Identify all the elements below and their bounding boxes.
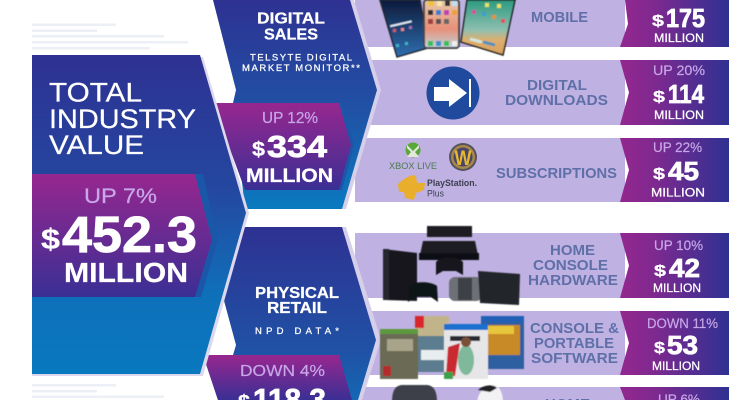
total heading: VALUE (49, 130, 144, 160)
total value tag: MILLION (64, 257, 188, 288)
source note lines, top (32, 24, 188, 50)
mobile label: MOBILE (531, 9, 588, 26)
icon: playstation plus: Plus (427, 188, 444, 198)
tag: console and portable software value: MILLION (652, 359, 700, 373)
console and portable software label (530, 320, 619, 367)
tag: digital downloads value: UP 20% (653, 63, 705, 78)
tag: digital downloads value: $ (653, 89, 665, 106)
home console hardware label (528, 242, 618, 289)
digital downloads label (505, 77, 608, 109)
subscriptions logos (389, 142, 477, 200)
icon: xbox live: XBOX LIVE (389, 161, 437, 172)
total heading (49, 78, 196, 160)
digital sales heading: SALES (264, 26, 318, 44)
tag: digital downloads value (620, 60, 729, 125)
tag: console and portable software value: 53 (667, 332, 698, 360)
total heading: INDUSTRY (49, 104, 196, 134)
home console hardware label: HOME (550, 242, 595, 259)
row: home accessories background (355, 387, 625, 400)
home console hardware label: HARDWARE (528, 272, 618, 289)
digital sales value tag: $ (252, 139, 265, 161)
icon: digital download arrow (426, 66, 480, 120)
total heading: TOTAL (49, 78, 142, 108)
icon: world of warcraft: W (454, 147, 472, 170)
digital sales value tag (213, 103, 351, 190)
total value tag: 452.3 (62, 206, 197, 263)
physical retail heading (255, 285, 339, 317)
digital sales value tag: UP 12% (262, 110, 318, 127)
panel: total industry value (32, 55, 249, 376)
tag: home console hardware value (620, 233, 729, 298)
digital downloads label: DOWNLOADS (505, 92, 608, 109)
tag: console and portable software value: $ (654, 340, 665, 357)
row: console and portable software background (355, 311, 625, 375)
accessories image (392, 385, 503, 400)
tag: mobile value: $ (652, 13, 664, 30)
tag: mobile value: MILLION (654, 31, 704, 45)
digital sales source: TELSYTE DIGITAL (250, 52, 352, 64)
tag: home accessories value (620, 387, 729, 400)
icon: playstation plus: PlayStation. (427, 178, 477, 188)
tag: subscriptions value: $ (653, 166, 665, 183)
home console hardware label: CONSOLE (533, 257, 608, 274)
physical retail value tag (203, 355, 352, 400)
tag: subscriptions value: MILLION (651, 186, 705, 200)
tag: home console hardware value: MILLION (653, 281, 701, 295)
icon: playstation plus (398, 175, 477, 200)
digital downloads label: DIGITAL (527, 77, 587, 94)
console and portable software label: PORTABLE (534, 335, 614, 352)
tag: console and portable software value: DOWN 11% (647, 316, 718, 331)
tag: digital downloads value: MILLION (654, 108, 704, 122)
digital sales value tag: 334 (267, 129, 328, 164)
digital sales source (242, 52, 360, 74)
digital sales heading (257, 10, 325, 44)
tag: mobile value (620, 0, 729, 47)
subscriptions label: SUBSCRIPTIONS (496, 165, 617, 182)
tag: home console hardware value: 42 (669, 255, 700, 283)
physical retail source: NPD DATA* (255, 326, 339, 337)
total value tag (32, 174, 212, 297)
source note lines, bottom (32, 384, 164, 398)
total value tag: $ (41, 224, 60, 256)
panel: physical retail (203, 227, 381, 400)
mobile: phones image (380, 0, 515, 57)
digital sales source: MARKET MONITOR** (242, 63, 360, 74)
digital sales heading: DIGITAL (257, 10, 325, 28)
console and portable software label: CONSOLE & (530, 320, 619, 337)
tag: digital downloads value: 114 (668, 81, 705, 109)
tag: console and portable software value (620, 311, 729, 375)
physical retail heading: PHYSICAL (255, 285, 339, 302)
tag: home console hardware value: $ (654, 263, 666, 280)
physical retail value tag: DOWN 4% (240, 363, 325, 380)
physical retail heading: RETAIL (267, 300, 327, 317)
digital sales value tag: MILLION (246, 165, 333, 187)
row: home console hardware background (355, 233, 625, 298)
console and portable software label: SOFTWARE (531, 350, 618, 367)
total value tag: UP 7% (84, 185, 157, 208)
tag: subscriptions value: UP 22% (653, 140, 702, 155)
row: mobile background (355, 0, 625, 47)
tag: home console hardware value: UP 10% (654, 238, 703, 253)
game boxes image (380, 316, 524, 379)
tag: subscriptions value (620, 138, 729, 202)
tag: subscriptions value: 45 (668, 158, 699, 186)
tag: mobile value: 175 (666, 5, 705, 33)
consoles image (383, 226, 520, 305)
panel: digital sales (213, 0, 381, 209)
row: digital downloads background (355, 60, 625, 125)
row: subscriptions background (355, 138, 625, 202)
